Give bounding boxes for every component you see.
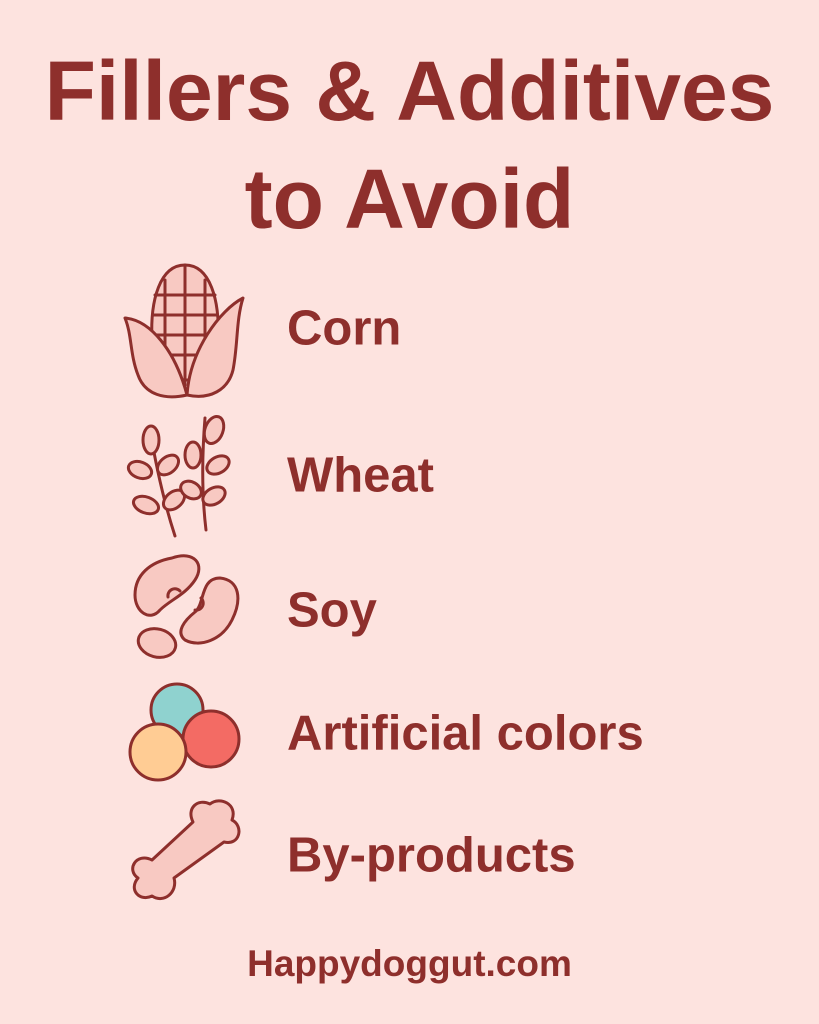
icon: corn [125, 265, 243, 397]
item text: Artificial colors: Artificial colors [287, 706, 644, 760]
title [45, 44, 774, 246]
item text: Soy: Soy [287, 584, 377, 638]
item text: Corn: Corn [287, 302, 401, 356]
icon: wheat [126, 414, 232, 536]
item text: By-products: By-products [287, 828, 576, 882]
title: to Avoid [245, 152, 574, 246]
title: Fillers & Additives [45, 44, 774, 138]
icon: soy [135, 556, 238, 661]
item text: Wheat: Wheat [287, 448, 434, 502]
footer: Happydoggut.com [247, 943, 572, 984]
icon: colors [130, 684, 239, 780]
icon: bone [133, 801, 239, 899]
